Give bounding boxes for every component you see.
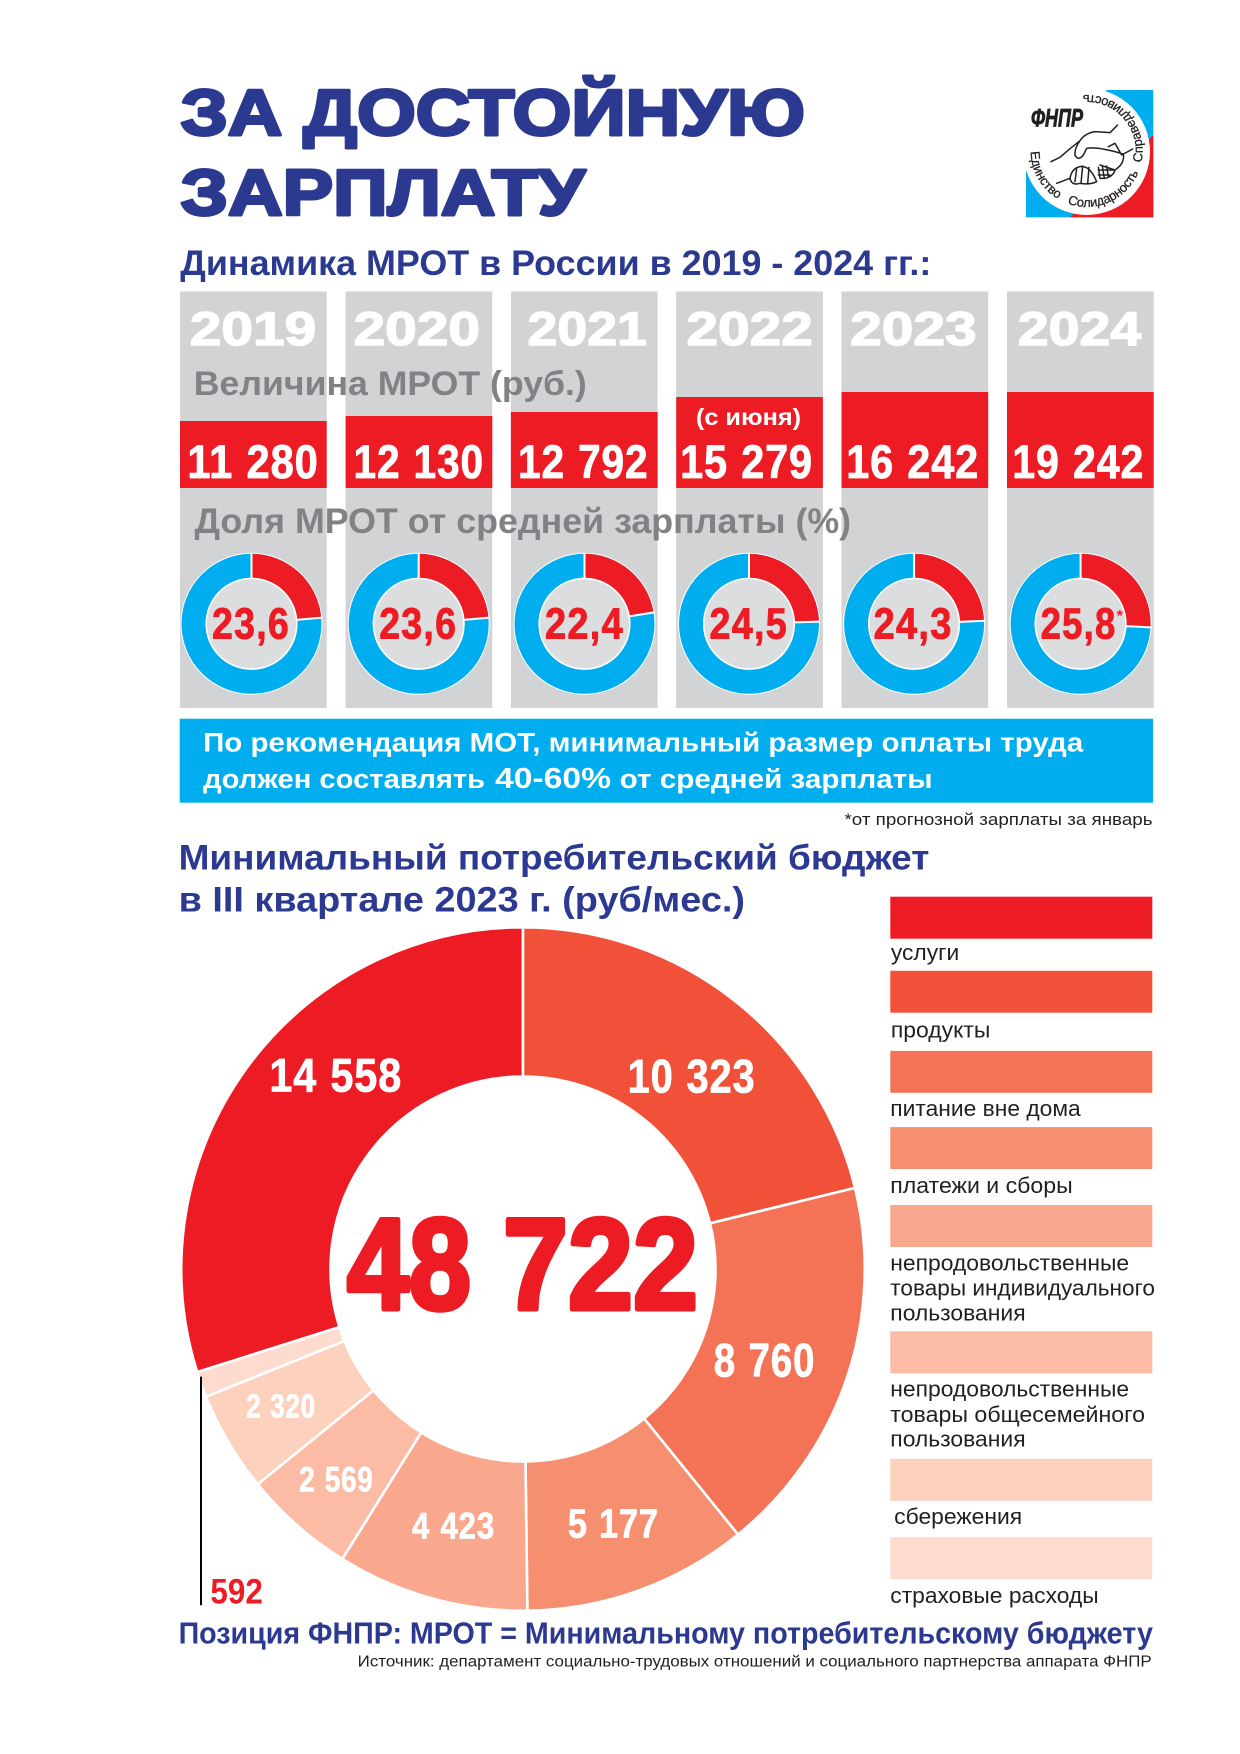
- donut 2024: [1010, 553, 1152, 695]
- donut 2019: [180, 553, 322, 695]
- legend: непродовольственные: [890, 1377, 1129, 1402]
- logo: FNPR emblem: [1026, 90, 1154, 218]
- donut values: 2 569: [299, 1460, 374, 1500]
- heading: share of average wage: Доля МРОТ от средней зарплаты (%): [194, 502, 851, 541]
- legend: пользования: [890, 1426, 1026, 1451]
- donut values: 2 320: [246, 1387, 316, 1424]
- legend: товары общесемейного: [890, 1402, 1145, 1427]
- heading: MROT dynamics: Динамика МРОТ в России в 2019 - 2024 гг.:: [180, 244, 931, 283]
- logo: FNPR emblem: Справедливость: [1083, 94, 1146, 162]
- title: ЗА ДОСТОЙНУЮ: [180, 76, 805, 149]
- bars: MROT amounts: 16 242: [846, 436, 979, 489]
- legend: питание вне дома: [890, 1096, 1081, 1121]
- donut 2020: 23,6: [379, 599, 457, 648]
- bars: MROT amounts: 19 242: [1012, 436, 1144, 489]
- donut 2020: [348, 553, 490, 695]
- legend: товары индивидуального: [890, 1275, 1155, 1300]
- callout: ILO recommendation: [180, 719, 1153, 803]
- year labels: 2019: [190, 302, 316, 355]
- total value: 48: [347, 1191, 471, 1337]
- donut 2021: 22,4: [545, 599, 624, 648]
- legend: страховые расходы: [890, 1583, 1099, 1608]
- source: Источник: департамент социально-трудовых отношений и социального партнерства аппарата ФНПР: [358, 1653, 1152, 1670]
- year labels: 2023: [850, 302, 977, 355]
- bars: MROT amounts: 11 280: [187, 436, 319, 489]
- bars: MROT amounts: 12 792: [518, 436, 648, 489]
- title: [180, 76, 805, 229]
- panel: year columns background: [180, 292, 1154, 708]
- logo: FNPR emblem: Солидарность: [1068, 172, 1138, 209]
- logo: FNPR emblem: ФНПР: [1031, 105, 1083, 132]
- callout: ILO recommendation: По рекомендация МОТ, минимальный размер оплаты труда: [203, 728, 1084, 758]
- donut values: 10 323: [628, 1049, 756, 1102]
- heading: minimum consumer budget: в III квартале 2023 г. (руб/мес.): [179, 880, 745, 920]
- heading: minimum consumer budget: Минимальный потребительский бюджет: [179, 838, 929, 878]
- donut chart: budget structure: [181, 927, 865, 1611]
- donut 2021: [514, 553, 656, 695]
- legend: продукты: [891, 1017, 990, 1042]
- donut values: 5 177: [568, 1500, 659, 1546]
- bars: MROT amounts: [180, 392, 1154, 489]
- footnote: *от прогнозной зарплаты за январь: [844, 810, 1153, 829]
- legend: [890, 897, 1155, 1608]
- callout: smallest segment 592: 592: [210, 1573, 263, 1612]
- legend: пользования: [890, 1300, 1026, 1326]
- bars: MROT amounts: 15 279: [680, 436, 813, 489]
- FNPR position statement: Позиция ФНПР: МРОТ = Минимальному потребительскому бюджету: [179, 1616, 1154, 1650]
- donut values: [246, 1049, 815, 1546]
- year labels: 2022: [686, 302, 813, 355]
- donut 2024: *: [1117, 608, 1124, 625]
- callout: ILO recommendation: 40-60%: [495, 763, 611, 795]
- callout: ILO recommendation: от средней зарплаты: [620, 764, 933, 794]
- title: ЗАРПЛАТУ: [180, 157, 586, 229]
- legend: платежи и сборы: [890, 1173, 1073, 1198]
- bars: MROT amounts: (с июня): [696, 404, 801, 430]
- heading: minimum consumer budget: [179, 838, 929, 920]
- donut 2023: 24,3: [874, 599, 953, 648]
- legend: сбережения: [894, 1504, 1022, 1529]
- donut 2023: [843, 553, 985, 695]
- donut values: 14 558: [269, 1049, 402, 1102]
- year labels: 2020: [354, 302, 480, 355]
- year labels: 2024: [1018, 302, 1141, 355]
- donut values: 4 423: [412, 1505, 495, 1546]
- heading: MROT value: Величина МРОТ (руб.): [194, 365, 587, 403]
- donut 2022: [678, 553, 820, 695]
- donut 2024: 25,8: [1041, 599, 1117, 648]
- donut 2022: 24,5: [710, 599, 788, 648]
- legend: услуги: [891, 940, 959, 965]
- bars: MROT amounts: 12 130: [354, 436, 484, 489]
- year labels: [190, 302, 1141, 355]
- total value: [347, 1191, 698, 1337]
- logo: FNPR emblem: Единство: [1028, 152, 1060, 198]
- callout: ILO recommendation: должен составлять: [203, 764, 485, 794]
- legend: непродовольственные: [890, 1250, 1129, 1275]
- donut values: 8 760: [714, 1334, 815, 1387]
- donut 2019: 23,6: [212, 599, 290, 648]
- year labels: 2021: [528, 302, 647, 355]
- total value: 722: [503, 1191, 698, 1337]
